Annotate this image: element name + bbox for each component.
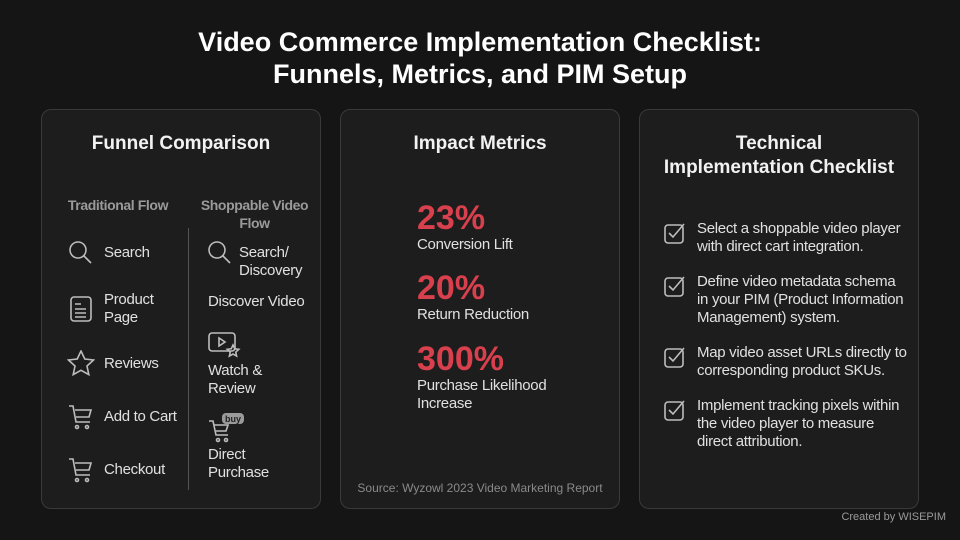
text: reviews: Reviews bbox=[104, 355, 159, 372]
title: Video Commerce Implementation Checklist: bbox=[198, 27, 762, 57]
subheading: shoppable video flow bbox=[201, 197, 308, 231]
text: direct purchase bbox=[208, 446, 269, 481]
heading: impact metrics: Impact Metrics bbox=[413, 133, 547, 154]
metric: return reduction bbox=[417, 269, 529, 323]
text: product page: Page bbox=[104, 309, 138, 326]
icon: buy cart bbox=[209, 413, 244, 442]
panel: technical checklist: Define video metadata schema bbox=[697, 273, 895, 290]
heading: technical checklist: Implementation Checklist bbox=[664, 157, 894, 178]
heading: technical checklist: Technical bbox=[736, 133, 822, 154]
text: watch and review: Review bbox=[208, 380, 255, 397]
icon: cart bbox=[69, 405, 92, 430]
metric: conversion lift: Conversion Lift bbox=[417, 236, 513, 253]
icon: star bbox=[67, 350, 95, 376]
panel: technical checklist: with direct cart integration. bbox=[697, 238, 863, 255]
text: watch and review: Watch & bbox=[208, 362, 262, 379]
metric: purchase likelihood: 300% bbox=[417, 340, 504, 378]
metric: return reduction: Return Reduction bbox=[417, 306, 529, 323]
panel: technical checklist: Implement tracking pixels within bbox=[697, 397, 899, 414]
panel: technical checklist: Select a shoppable video player bbox=[697, 220, 900, 237]
text: direct purchase: Direct bbox=[208, 446, 245, 463]
text: discover video: Discover Video bbox=[208, 293, 304, 310]
icon: buy cart: buy bbox=[225, 414, 241, 424]
divider line bbox=[188, 228, 189, 490]
title bbox=[198, 27, 762, 89]
text: add to cart: Add to Cart bbox=[104, 408, 177, 425]
panel: technical checklist: direct attribution. bbox=[697, 433, 802, 450]
text: direct purchase: Purchase bbox=[208, 464, 269, 481]
title: Funnels, Metrics, and PIM Setup bbox=[273, 59, 687, 89]
text: search: Search bbox=[104, 244, 150, 261]
checklist item 4 bbox=[664, 397, 899, 450]
metric: purchase likelihood: Purchase Likelihood bbox=[417, 377, 546, 394]
metric: purchase likelihood bbox=[417, 340, 546, 412]
text: search discovery bbox=[239, 244, 302, 279]
icon: search bbox=[69, 241, 92, 264]
text: search discovery: Search/ bbox=[239, 244, 289, 261]
icon: search discovery bbox=[208, 241, 230, 264]
text: product page bbox=[104, 291, 154, 326]
heading: funnel comparison: Funnel Comparison bbox=[92, 133, 270, 154]
metric: purchase likelihood: Increase bbox=[417, 395, 472, 412]
checklist item 3 bbox=[664, 344, 907, 379]
panel: technical checklist bbox=[639, 109, 919, 509]
checklist item 2 bbox=[664, 273, 903, 326]
panel: technical checklist: Management) system. bbox=[697, 309, 840, 326]
panel: funnel comparison bbox=[41, 109, 321, 509]
checklist item 1 bbox=[664, 220, 900, 255]
icon: product page bbox=[70, 296, 92, 322]
icon: cart checkout bbox=[69, 458, 92, 482]
metric: conversion lift bbox=[417, 199, 513, 253]
panel: technical checklist: Map video asset URLs directly to bbox=[697, 344, 907, 361]
icon: video star bbox=[208, 332, 240, 358]
metric: return reduction: 20% bbox=[417, 269, 485, 307]
panel: impact metrics bbox=[340, 109, 620, 509]
footer credit: Created by WISEPIM bbox=[841, 511, 946, 523]
source note: Source: Wyzowl 2023 Video Marketing Report bbox=[357, 481, 603, 495]
panel: technical checklist: corresponding product SKUs. bbox=[697, 362, 885, 379]
panel: technical checklist: the video player to measure bbox=[697, 415, 874, 432]
text: search discovery: Discovery bbox=[239, 262, 302, 279]
text: checkout: Checkout bbox=[104, 461, 165, 478]
text: watch and review bbox=[208, 362, 262, 397]
metric: conversion lift: 23% bbox=[417, 199, 485, 237]
text: product page: Product bbox=[104, 291, 154, 308]
subheading: shoppable video flow: Shoppable Video bbox=[201, 197, 308, 213]
subheading: shoppable video flow: Flow bbox=[239, 215, 270, 231]
panel: technical checklist: in your PIM (Product Information bbox=[697, 291, 903, 308]
subheading: traditional flow: Traditional Flow bbox=[68, 197, 168, 213]
heading: technical checklist bbox=[664, 133, 894, 178]
